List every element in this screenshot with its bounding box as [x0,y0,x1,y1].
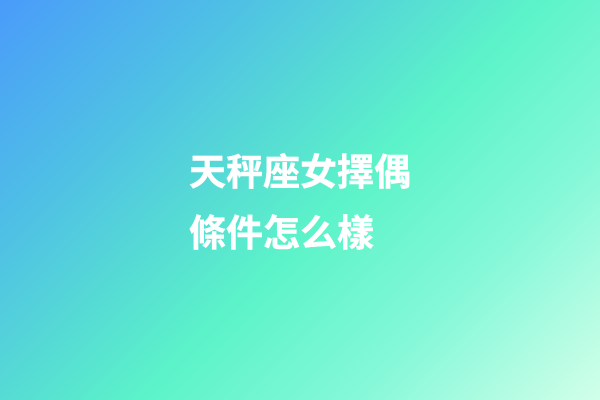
title line 1: 天秤座女擇偶 [189,152,411,193]
title [189,152,411,254]
title line 2: 條件怎么樣 [189,213,374,254]
